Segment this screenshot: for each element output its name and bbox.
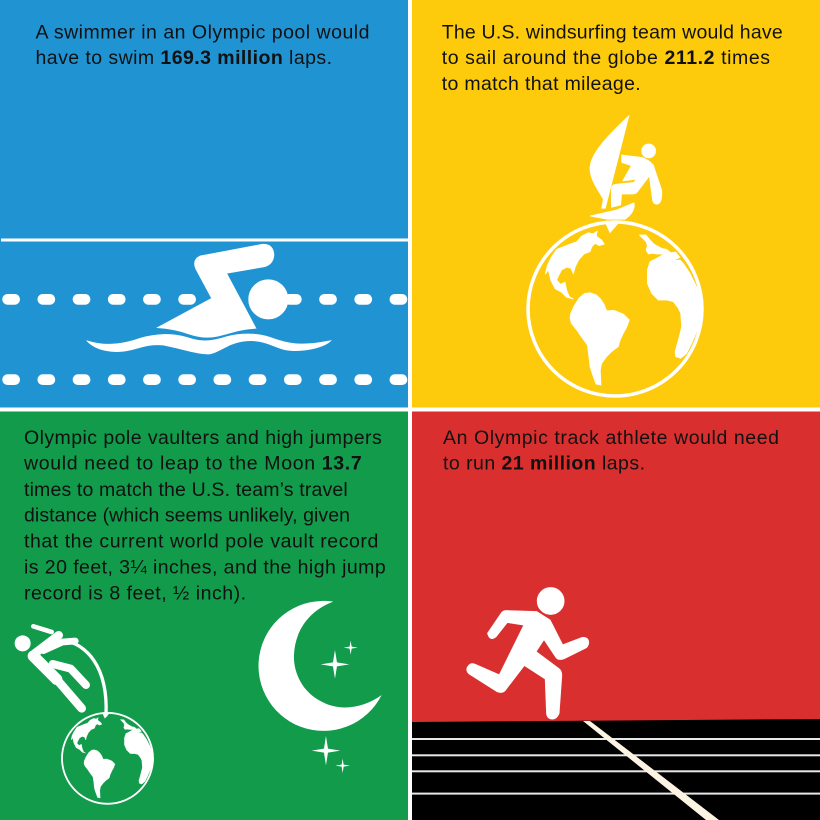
panel: pole vault <box>0 412 408 820</box>
text: pole vault: distance (which seems unlikely, given <box>24 505 350 527</box>
text: pole vault: would need to leap to the Moon 13.7 <box>23 452 362 474</box>
text: swimmer laps: A swimmer in an Olympic pool would <box>36 22 370 44</box>
panel: track <box>412 412 820 820</box>
panel: swimming pool <box>0 0 409 408</box>
text: track <box>443 427 779 474</box>
text: track: to run 21 million laps. <box>443 452 645 474</box>
text: pole vault: times to match the U.S. team’s travel <box>24 479 348 501</box>
text: pole vault: is 20 feet, 3¼ inches, and the high jump <box>24 556 386 578</box>
running track <box>412 719 820 820</box>
text: track: An Olympic track athlete would need <box>443 427 779 449</box>
pool edge line <box>1 238 409 242</box>
lane rope: upper <box>2 294 407 305</box>
text: pole vault: that the current world pole vault record <box>24 531 378 553</box>
panel: windsurfing <box>412 0 820 408</box>
text: windsurfing: to match that mileage. <box>442 73 641 95</box>
icon: swimmer <box>87 244 331 354</box>
text: pole vault: record is 8 feet, ½ inch). <box>24 582 246 604</box>
icon: globe <box>528 222 703 396</box>
icon: stars <box>312 641 358 773</box>
text: swimmer laps <box>36 22 370 69</box>
icon: crescent moon <box>259 601 382 731</box>
icon: small globe <box>62 713 154 804</box>
text: swimmer laps: have to swim 169.3 million laps. <box>36 47 332 69</box>
icon: pole vaulter <box>15 626 106 715</box>
text: windsurfing: to sail around the globe 211.2 times <box>442 47 770 69</box>
icon: runner <box>467 588 589 719</box>
lane rope: lower <box>2 374 407 385</box>
text: pole vault: Olympic pole vaulters and high jumpers <box>24 427 382 449</box>
text: windsurfing: The U.S. windsurfing team would have <box>442 22 783 44</box>
text: windsurfing <box>442 22 783 95</box>
icon: windsurfer <box>590 116 662 219</box>
text: pole vault <box>23 427 386 604</box>
